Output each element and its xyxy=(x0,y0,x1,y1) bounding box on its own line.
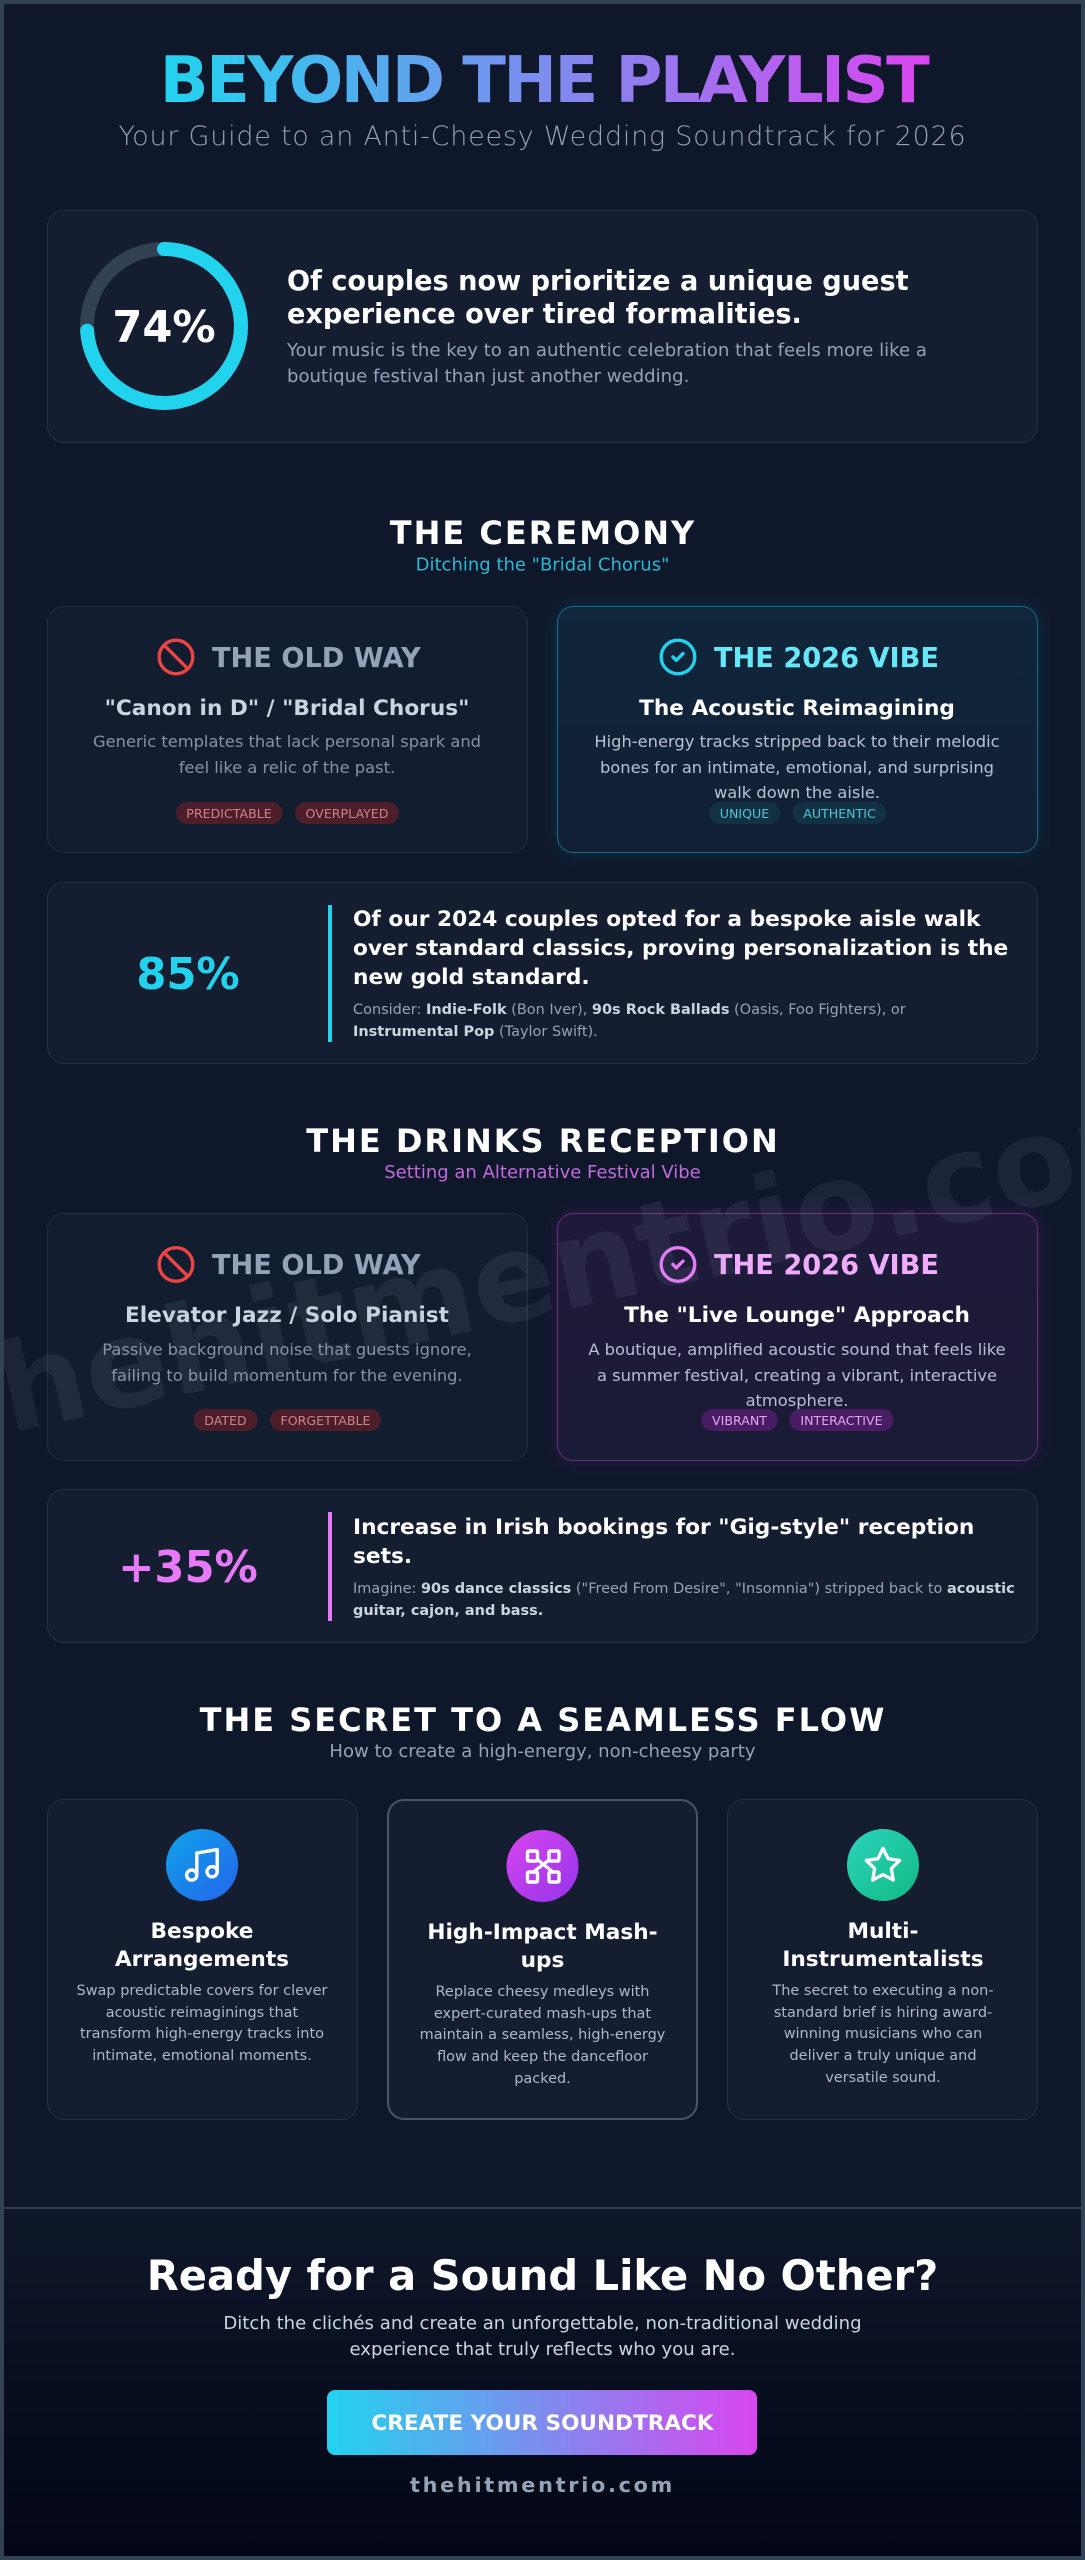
stat heading: over standard classics, proving personalization is the xyxy=(353,936,1008,961)
stat number: 85% xyxy=(136,950,240,1000)
card description: standard brief is hiring award- xyxy=(774,2005,992,2021)
stat heading: Increase in Irish bookings for "Gig-style" reception xyxy=(353,1515,974,1540)
icon: ban xyxy=(159,1248,193,1281)
panel: 74% stat xyxy=(48,210,1038,442)
stat note: Instrumental Pop (Taylor Swift). xyxy=(353,1024,598,1040)
call to action button: CREATE YOUR SOUNDTRACK xyxy=(371,2411,715,2436)
card description: bones for an intimate, emotional, and surprising xyxy=(600,758,994,777)
card description: failing to build momentum for the evening. xyxy=(111,1366,463,1385)
section subheading: flow: How to create a high-energy, non-cheesy party xyxy=(329,1741,756,1762)
section subheading: drinks: Setting an Alternative Festival Vibe xyxy=(384,1162,701,1183)
card description: acoustic reimaginings that xyxy=(106,2005,299,2021)
panel: ceremony old way xyxy=(48,606,528,852)
tag: interactive: INTERACTIVE xyxy=(800,1413,883,1428)
panel: multi-instrumentalists xyxy=(728,1800,1038,2120)
card description: Replace cheesy medleys with xyxy=(436,1984,649,2000)
card description: atmosphere. xyxy=(746,1391,848,1410)
card description: transform high-energy tracks into xyxy=(80,2026,324,2042)
card heading: THE 2026 VIBE xyxy=(714,643,939,674)
stat description: Your music is the key to an authentic celebration that feels more like a xyxy=(286,340,927,361)
section heading: the drinks reception: THE DRINKS RECEPTION xyxy=(306,1122,780,1160)
stat note: Consider: Indie-Folk (Bon Iver), 90s Rock Ballads (Oasis, Foo Fighters), or xyxy=(353,1002,906,1018)
tag: dated: DATED xyxy=(204,1413,247,1428)
card description: Generic templates that lack personal spark and xyxy=(93,732,481,751)
icon: ban xyxy=(159,640,193,674)
tag: unique xyxy=(709,802,780,824)
card title: High-Impact Mash- xyxy=(427,1920,658,1945)
stat heading: sets. xyxy=(353,1544,412,1569)
section heading: seamless flow: THE SECRET TO A SEAMLESS FLOW xyxy=(200,1701,886,1739)
footer website: thehitmentrio.com xyxy=(410,2473,675,2497)
tag: overplayed: OVERPLAYED xyxy=(306,806,388,821)
card title: ups xyxy=(521,1948,564,1973)
stat heading: Of couples now prioritize a unique guest xyxy=(287,266,909,297)
tag: authentic: AUTHENTIC xyxy=(803,806,876,821)
tag: interactive xyxy=(790,1409,894,1431)
card description: expert-curated mash-ups that xyxy=(434,2006,651,2022)
footer divider xyxy=(0,2207,1085,2209)
stat heading: Of our 2024 couples opted for a bespoke aisle walk xyxy=(353,907,981,932)
card description: The secret to executing a non- xyxy=(771,1983,994,1999)
card title: Elevator Jazz / Solo Pianist xyxy=(125,1303,449,1328)
card description: maintain a seamless, high-energy xyxy=(420,2027,666,2043)
panel: ceremony 2026 vibe xyxy=(558,606,1038,852)
section heading: the ceremony: THE CEREMONY xyxy=(390,514,696,552)
stat heading: experience over tired formalities. xyxy=(287,299,802,330)
card description: winning musicians who can xyxy=(784,2026,982,2042)
card title: The "Live Lounge" Approach xyxy=(624,1303,970,1328)
icon: check circle xyxy=(661,640,695,674)
ring chart: 74%: 74% xyxy=(112,303,216,353)
card description: flow and keep the dancefloor xyxy=(437,2049,648,2065)
card title: The Acoustic Reimagining xyxy=(639,696,955,721)
tag: unique: UNIQUE xyxy=(720,806,769,821)
card title: Bespoke xyxy=(151,1919,253,1944)
panel: +35% stat xyxy=(48,1490,1038,1642)
card description: versatile sound. xyxy=(825,2070,941,2086)
card heading: THE 2026 VIBE xyxy=(714,1250,939,1281)
footer heading: Ready for a Sound Like No Other? xyxy=(147,2251,938,2300)
footer text: Ditch the clichés and create an unforgettable, non-traditional wedding xyxy=(223,2313,862,2334)
card title: "Canon in D" / "Bridal Chorus" xyxy=(105,696,469,721)
section subheading: ceremony: Ditching the "Bridal Chorus" xyxy=(416,554,669,576)
panel: bespoke arrangements xyxy=(48,1800,358,2120)
stat divider xyxy=(328,905,332,1042)
card title: Multi- xyxy=(847,1919,919,1944)
tag: forgettable: FORGETTABLE xyxy=(280,1413,371,1428)
card description: walk down the aisle. xyxy=(714,783,880,802)
icon: music xyxy=(166,1829,238,1901)
tag: authentic xyxy=(793,802,886,824)
stat divider xyxy=(328,1512,332,1621)
panel: drinks old way xyxy=(48,1214,528,1460)
icon: star xyxy=(847,1829,919,1901)
card description: feel like a relic of the past. xyxy=(179,758,395,777)
panel: high-impact mash-ups xyxy=(388,1800,697,2119)
stat note: guitar, cajon, and bass. xyxy=(353,1603,543,1619)
stat description: boutique festival than just another wedding. xyxy=(287,366,689,387)
footer text: experience that truly reflects who you are. xyxy=(349,2339,736,2360)
tag: dated xyxy=(194,1409,258,1431)
card title: Instrumentalists xyxy=(782,1947,984,1972)
card description: intimate, emotional moments. xyxy=(92,2048,312,2064)
ring chart: 74% xyxy=(87,249,241,403)
tag: predictable: PREDICTABLE xyxy=(186,806,272,821)
card heading: THE OLD WAY xyxy=(212,643,421,674)
tag: vibrant xyxy=(702,1409,778,1431)
card description: packed. xyxy=(514,2071,571,2087)
card description: A boutique, amplified acoustic sound that feels like xyxy=(588,1340,1006,1359)
card description: deliver a truly unique and xyxy=(789,2048,977,2064)
panel: drinks 2026 vibe xyxy=(558,1214,1038,1460)
icon: check circle xyxy=(661,1248,695,1281)
card title: Arrangements xyxy=(115,1947,289,1972)
card description: Swap predictable covers for clever xyxy=(77,1983,328,1999)
call to action button xyxy=(327,2390,757,2455)
card description: High-energy tracks stripped back to their melodic xyxy=(594,732,1000,751)
card description: Passive background noise that guests ignore, xyxy=(102,1340,472,1359)
tag: vibrant: VIBRANT xyxy=(712,1413,767,1428)
tag: overplayed xyxy=(295,802,399,824)
card heading: THE OLD WAY xyxy=(212,1250,421,1281)
footer background xyxy=(0,2208,1085,2560)
panel: 85% stat xyxy=(48,882,1038,1064)
stat heading: new gold standard. xyxy=(353,965,590,990)
stat note: Imagine: 90s dance classics ("Freed From Desire", "Insomnia") stripped back to acoustic xyxy=(353,1581,1015,1597)
stat number: +35% xyxy=(118,1543,258,1593)
icon: mash-up xyxy=(506,1830,578,1902)
title: BEYOND THE PLAYLIST xyxy=(160,44,930,118)
tag: predictable xyxy=(176,802,282,824)
subtitle: Your Guide to an Anti-Cheesy Wedding Soundtrack for 2026 xyxy=(119,121,966,152)
card description: a summer festival, creating a vibrant, interactive xyxy=(597,1366,997,1385)
tag: forgettable xyxy=(270,1409,381,1431)
